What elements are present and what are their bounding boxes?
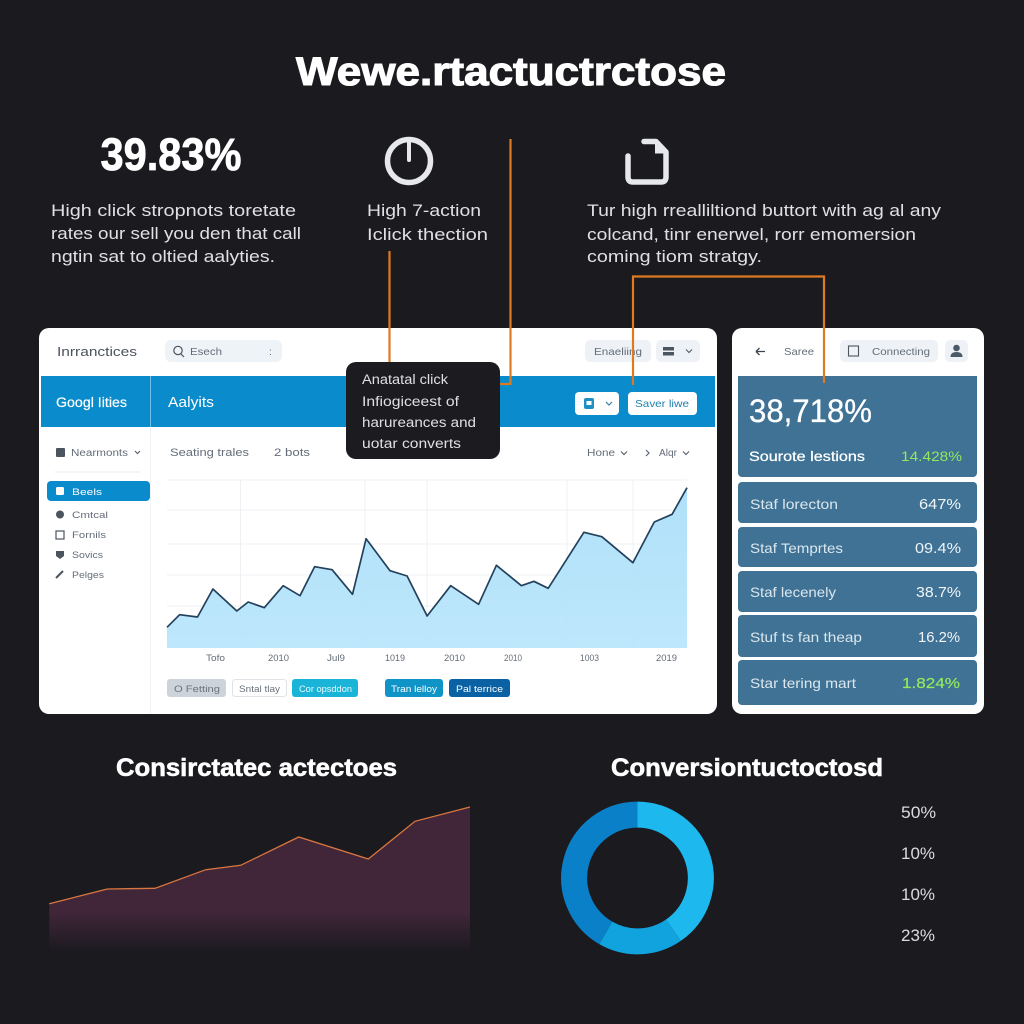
donut legend values: 10%	[901, 845, 935, 863]
chart toolbar	[170, 447, 689, 459]
strategy description	[587, 201, 942, 266]
strategy description: colcand, tinr enerwel, rorr emomersion	[587, 225, 916, 244]
stat description: rates our sell you den that call	[51, 224, 301, 243]
connector: stat text to tooltip	[388, 251, 391, 363]
headline metric card: 14.428%	[901, 448, 962, 464]
heading: lower left chart: Consirctatec actectoes	[116, 754, 397, 782]
icon: power	[388, 139, 430, 182]
top right controls: Enaeliing	[594, 346, 642, 358]
area chart: lower left	[49, 807, 470, 952]
band action button	[628, 392, 697, 415]
filter buttons: O Fetting	[174, 684, 220, 695]
x axis labels: 2010	[444, 653, 465, 664]
headline metric card: 38,718%	[749, 393, 872, 429]
metric row 4: 16.2%	[918, 630, 960, 646]
x axis labels: 2010	[268, 653, 289, 664]
metric row 2	[738, 527, 977, 567]
active menu item	[47, 481, 150, 501]
blue header band: Aalyits	[168, 395, 214, 411]
x axis labels: 2019	[656, 653, 677, 664]
donut legend values	[901, 804, 936, 945]
chart toolbar: 2 bots	[274, 447, 311, 459]
headline metric card	[738, 376, 977, 477]
filter buttons: Cor opsddon	[299, 684, 352, 695]
metric row 2: Staf Temprtes	[750, 540, 843, 556]
tooltip callout	[346, 362, 500, 459]
filter buttons: Sntal tlay	[239, 684, 280, 695]
sidebar	[47, 427, 150, 714]
stat description: High click stropnots toretate	[51, 201, 296, 220]
metric row 1: 647%	[919, 497, 961, 513]
strategy description: Tur high rrealliltiond buttort with ag al any	[587, 201, 942, 220]
donut chart	[574, 815, 701, 941]
metric row 1	[738, 482, 977, 523]
area chart: main trend	[167, 480, 687, 664]
x axis labels: Jul9	[327, 653, 345, 664]
metrics header: Saree	[784, 346, 814, 358]
donut legend values: 50%	[901, 804, 936, 822]
menu items: Sovics	[72, 550, 103, 561]
top right controls	[585, 340, 700, 362]
connector: strategy text to buttons and metric card	[633, 276, 824, 385]
connector: title to tooltip	[499, 139, 510, 384]
band icon button	[575, 392, 619, 415]
metric row 3: Staf lecenely	[750, 584, 836, 600]
blue header band	[41, 376, 715, 427]
stat block: 39.83%	[51, 129, 301, 266]
menu items: Cmtcal	[72, 510, 108, 521]
menu items	[56, 510, 108, 581]
donut legend values: 23%	[901, 927, 935, 945]
metric row 5: Star tering mart	[750, 675, 856, 691]
active menu item: Beels	[72, 487, 102, 498]
band action button: Saver liwe	[635, 398, 689, 410]
tooltip callout: Anatatal click	[362, 372, 448, 387]
metric row 4	[738, 615, 977, 657]
stat number: 39.83%	[100, 129, 242, 180]
stat description	[51, 201, 301, 266]
action description	[367, 201, 488, 244]
stat description: ngtin sat to oltied aalyties.	[51, 247, 275, 266]
x axis labels: 1019	[385, 653, 405, 664]
x axis labels: 2010	[504, 653, 522, 664]
metric row 3	[738, 571, 977, 612]
tooltip callout: harureances and	[362, 415, 476, 430]
heading: lower right chart: Conversiontuctoctosd	[611, 754, 883, 782]
search box: :	[269, 346, 272, 358]
metric row 4: Stuf ts fan theap	[750, 629, 862, 645]
filter buttons: Pal terrice	[456, 684, 503, 695]
title: Wewe.rtactuctrctose	[296, 50, 726, 94]
sidebar: Nearmonts	[71, 448, 128, 459]
metric row 3: 38.7%	[916, 585, 961, 601]
menu items: Fornils	[72, 530, 106, 541]
icon: document	[628, 142, 668, 182]
filter buttons: Tran lelloy	[391, 684, 437, 695]
action description: Iclick thection	[367, 225, 488, 244]
panel: metrics sidebar	[732, 328, 984, 714]
metric row 1: Staf lorecton	[750, 496, 838, 512]
filter buttons	[167, 679, 510, 697]
metric row 5: 1.824%	[902, 676, 960, 692]
metrics header: Connecting	[872, 346, 930, 358]
chart toolbar: Alqr	[659, 448, 678, 459]
search box	[165, 340, 282, 362]
tooltip callout: uotar converts	[362, 436, 461, 451]
panel: main dashboard	[39, 328, 717, 714]
chart toolbar: Hone	[587, 448, 616, 459]
headline metric card: Sourote lestions	[749, 448, 865, 464]
action description: High 7-action	[367, 201, 481, 220]
x axis labels	[206, 653, 677, 664]
metrics header	[756, 340, 968, 362]
x axis labels: 1003	[580, 653, 599, 664]
chart toolbar: Seating trales	[170, 447, 250, 459]
menu items: Pelges	[72, 570, 104, 581]
search box: Esech	[190, 347, 222, 358]
strategy description: coming tiom stratgy.	[587, 247, 762, 266]
x axis labels: Tofo	[206, 653, 225, 664]
dashboard brand: Inrranctices	[57, 344, 138, 359]
metric row 5	[738, 660, 977, 705]
donut legend values: 10%	[901, 886, 935, 904]
stat block: power icon and action text	[367, 139, 488, 244]
blue header band: Googl Iities	[56, 395, 127, 410]
stat block: document icon and strategy text	[587, 142, 942, 266]
tooltip callout: Infiogiceest of	[362, 394, 459, 409]
metric row 2: 09.4%	[915, 541, 961, 557]
